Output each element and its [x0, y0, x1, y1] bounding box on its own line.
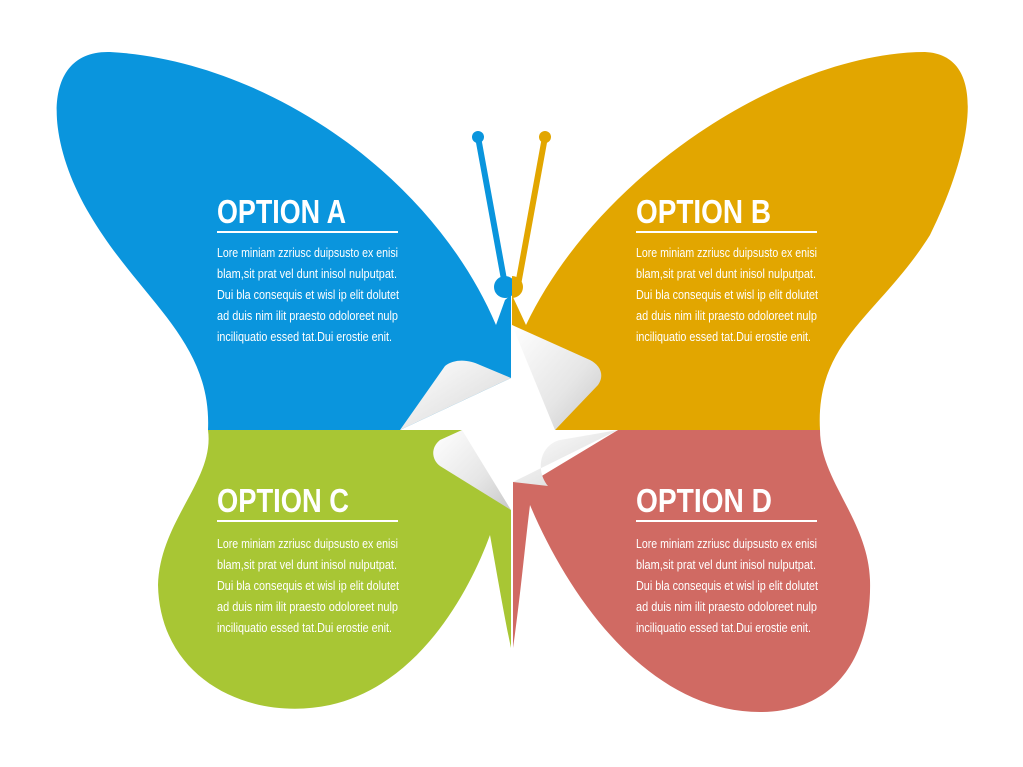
- text: option A: blam,sit prat vel dunt inisol nulputpat.: [217, 267, 397, 281]
- text: option D: blam,sit prat vel dunt inisol nulputpat.: [636, 558, 816, 572]
- text: option D: Lore miniam zzriusc duipsusto ex enisi: [636, 537, 817, 551]
- text: option A: Lore miniam zzriusc duipsusto ex enisi: [217, 246, 398, 260]
- wing: red (option D): [513, 430, 870, 712]
- wing: green (option C): [158, 430, 511, 709]
- text: option C: blam,sit prat vel dunt inisol nulputpat.: [217, 558, 397, 572]
- text: option B: Dui bla consequis et wisl ip elit dolutet: [636, 288, 818, 302]
- text: option D: [636, 482, 818, 635]
- text: option C: [217, 482, 399, 635]
- text: option B: blam,sit prat vel dunt inisol nulputpat.: [636, 267, 816, 281]
- text: option B: [636, 193, 818, 344]
- text: option D: inciliquatio essed tat.Dui erostie enit.: [636, 621, 811, 635]
- text: option D: OPTION D: [636, 482, 772, 519]
- text: option C: inciliquatio essed tat.Dui erostie enit.: [217, 621, 392, 635]
- text: option C: OPTION C: [217, 482, 349, 519]
- wing: orange (option B): [512, 52, 968, 430]
- text: option C: ad duis nim ilit praesto odoloreet nulp: [217, 600, 398, 614]
- curl: orange: [512, 325, 601, 430]
- text: option C: Lore miniam zzriusc duipsusto ex enisi: [217, 537, 398, 551]
- text: option B: inciliquatio essed tat.Dui erostie enit.: [636, 330, 811, 344]
- text: option A: inciliquatio essed tat.Dui erostie enit.: [217, 330, 392, 344]
- text: option A: ad duis nim ilit praesto odoloreet nulp: [217, 309, 398, 323]
- text: option B: ad duis nim ilit praesto odoloreet nulp: [636, 309, 817, 323]
- text: option B: OPTION B: [636, 193, 771, 230]
- text: option A: OPTION A: [217, 193, 346, 230]
- wing: blue (option A): [57, 52, 511, 430]
- text: option D: Dui bla consequis et wisl ip elit dolutet: [636, 579, 818, 593]
- text: option A: Dui bla consequis et wisl ip elit dolutet: [217, 288, 399, 302]
- curl: green: [433, 430, 511, 510]
- text: option B: Lore miniam zzriusc duipsusto ex enisi: [636, 246, 817, 260]
- antenna: orange: [512, 131, 551, 298]
- curl: blue: [400, 361, 511, 430]
- curl: red: [513, 430, 618, 486]
- text: option A: [217, 193, 399, 344]
- antenna: blue: [472, 131, 516, 298]
- text: option C: Dui bla consequis et wisl ip elit dolutet: [217, 579, 399, 593]
- text: option D: ad duis nim ilit praesto odoloreet nulp: [636, 600, 817, 614]
